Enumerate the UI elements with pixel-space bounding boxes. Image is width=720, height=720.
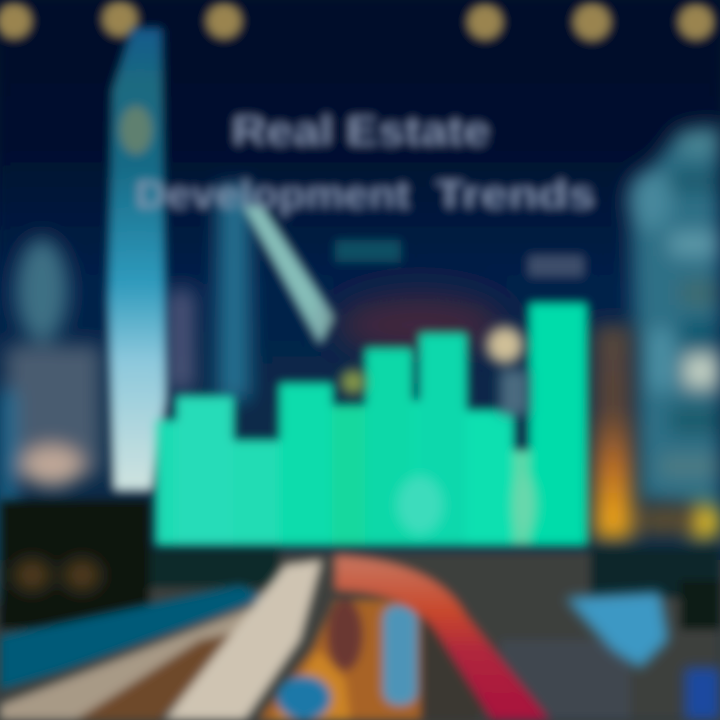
title: Development bbox=[135, 173, 410, 217]
title: Trends bbox=[435, 173, 595, 217]
right building bbox=[628, 125, 720, 510]
red light trail bbox=[335, 555, 550, 720]
tall tower bbox=[108, 28, 166, 490]
diagonal tower bbox=[218, 185, 250, 400]
dark red glow behind chart bbox=[335, 293, 505, 357]
subtitle labels bbox=[335, 240, 584, 277]
left background buildings bbox=[0, 238, 194, 600]
blue vehicles bbox=[566, 592, 720, 720]
chart highlights bbox=[341, 327, 537, 535]
orange glow right of chart bbox=[594, 325, 720, 540]
top lights bbox=[0, 1, 714, 41]
title bbox=[135, 107, 595, 217]
title: Real Estate bbox=[232, 107, 490, 154]
bar chart bbox=[156, 303, 587, 545]
road light trails bbox=[0, 560, 500, 720]
dark ground band bbox=[0, 500, 720, 720]
distant lights bbox=[14, 560, 100, 590]
diagonal tower highlight bbox=[242, 205, 335, 345]
